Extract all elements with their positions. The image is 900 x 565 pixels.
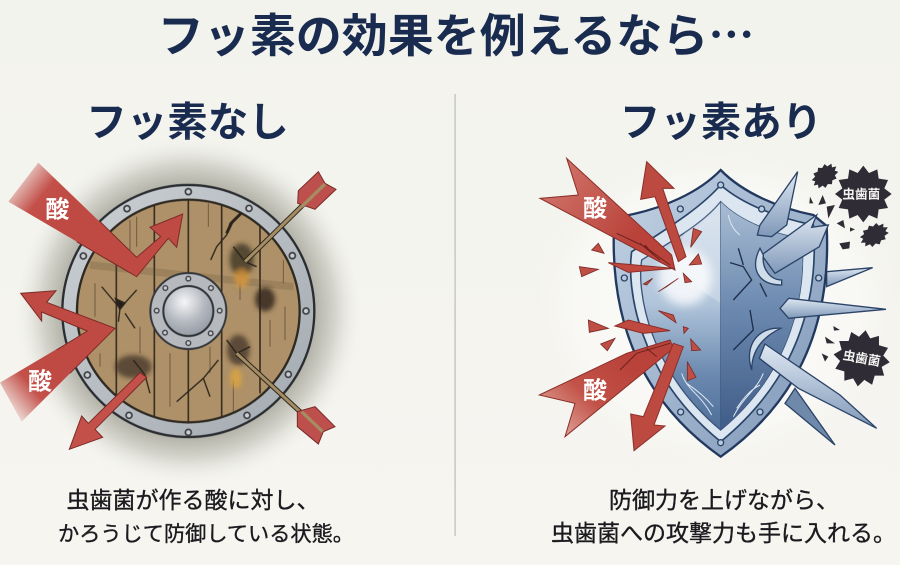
germ lower: [830, 326, 894, 390]
heading: with fluoride: フッ素あり: [620, 99, 822, 145]
shadow glow: [13, 136, 363, 486]
caption left: 虫歯菌が作る酸に対し、: [66, 487, 320, 513]
burn marks: [115, 243, 275, 388]
title: フッ素の効果を例えるなら…: [158, 0, 754, 66]
germ blobs: [807, 158, 843, 194]
acid label: 酸: [583, 377, 607, 404]
acid arrow lower: [0, 291, 115, 422]
rim rivets: [80, 189, 309, 435]
broken blades: [749, 172, 886, 428]
ornaments: [682, 215, 763, 417]
acid arrow upper shattered: [540, 158, 686, 272]
wooden arrow bottom right: [237, 353, 335, 444]
germ upper: 虫歯菌: [842, 187, 880, 202]
caption right: 虫歯菌への攻撃力も手に入れる。: [551, 520, 896, 546]
acid arrow lower shattered: [539, 320, 683, 451]
caption right: 防御力を上げながら、: [609, 487, 839, 513]
cracks: [102, 213, 257, 402]
wooden round shield: [62, 185, 314, 437]
acid label: 酸: [28, 368, 52, 395]
germ upper: [835, 166, 892, 222]
acid arrow upper: [8, 163, 183, 277]
center divider: [454, 94, 456, 536]
caption left: かろうじて防御している状態。: [58, 522, 354, 546]
acid label: 酸: [583, 196, 607, 223]
illustration: reinforced shield: [530, 147, 900, 467]
germ splats: [807, 158, 894, 390]
germ lower: 虫歯菌: [842, 347, 882, 369]
acid label: 酸: [45, 196, 69, 223]
center highlight: [658, 248, 712, 305]
illustration: damaged wooden shield: [0, 136, 363, 486]
acid arrow deflected downward: [69, 373, 147, 449]
center boss: [150, 273, 226, 349]
cracks: [730, 248, 767, 368]
shield rivets: [621, 182, 822, 446]
heater shield body: [614, 170, 827, 457]
wooden arrow top right: [245, 172, 336, 262]
flying shards: [579, 228, 702, 381]
rear blades: [785, 268, 873, 445]
white glow: [530, 147, 900, 467]
heading: without fluoride: フッ素なし: [86, 99, 289, 145]
